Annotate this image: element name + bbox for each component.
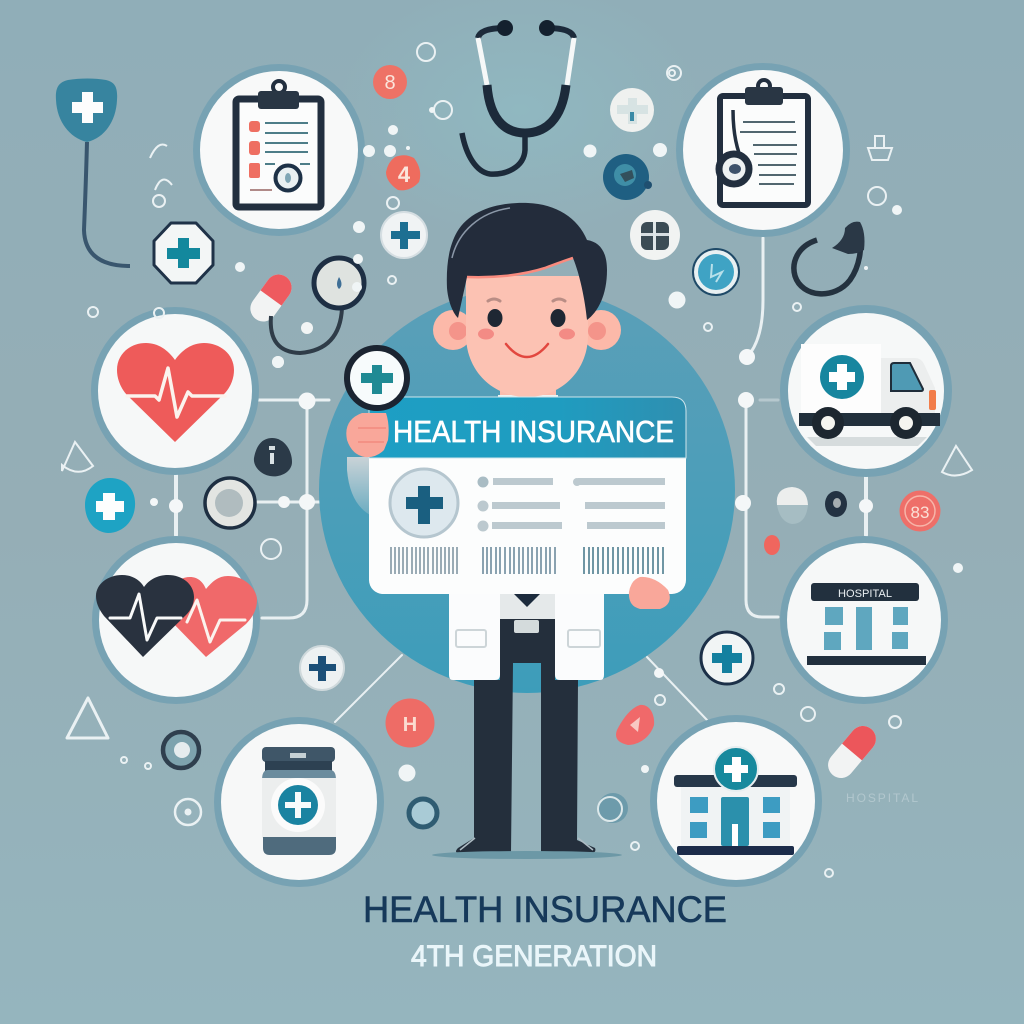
subtitle: 4TH GENERATION bbox=[411, 940, 657, 973]
main title: HEALTH INSURANCE bbox=[363, 889, 727, 930]
connector lines bbox=[150, 238, 873, 722]
badge: dark pin bbox=[254, 438, 292, 476]
hairline edge bbox=[467, 258, 573, 277]
cheeks bbox=[478, 328, 494, 340]
badge: red 4 bbox=[386, 155, 420, 190]
badge: dark oval bbox=[825, 491, 847, 517]
panel: heart bbox=[91, 307, 259, 475]
shoes highlight bbox=[460, 838, 593, 850]
insurance card bbox=[369, 397, 686, 594]
badge: ring blob right bbox=[598, 793, 628, 823]
face bbox=[466, 276, 588, 397]
badge: red 83 bbox=[900, 490, 940, 532]
legs and trousers bbox=[456, 619, 595, 853]
icon: floating badges bbox=[85, 65, 940, 827]
badge: top white plus bbox=[610, 88, 654, 132]
badge: red 8 bbox=[373, 65, 407, 99]
icon: hospital with cross sign bbox=[674, 747, 797, 855]
decorative specks bbox=[62, 43, 972, 877]
card info lines bbox=[478, 476, 665, 532]
eyes bbox=[488, 309, 502, 327]
panel: hospital bottom right bbox=[650, 715, 822, 887]
icon: red heart bbox=[165, 576, 257, 657]
ground shadow bbox=[432, 851, 622, 859]
neck bbox=[500, 380, 556, 398]
badge: red blob lower right bbox=[616, 705, 654, 745]
icon: top stethoscope bbox=[462, 20, 574, 174]
icon: red white pill left bbox=[245, 269, 297, 327]
icon: dark heart bbox=[96, 575, 194, 657]
panel: medicine jar bbox=[214, 717, 384, 887]
icon: clipboard with checklist bbox=[236, 81, 321, 207]
badge: plus lower left bbox=[300, 646, 344, 690]
magnifier bbox=[347, 348, 407, 408]
icon: small red white pill right bbox=[823, 721, 881, 783]
badge: dark ring left bbox=[163, 732, 199, 768]
badge: white blob bbox=[777, 487, 808, 524]
badge: white dark-centre button bbox=[630, 210, 680, 260]
card heading: HEALTH INSURANCE bbox=[393, 414, 674, 449]
icon: hospital building bbox=[807, 583, 926, 665]
badge: plus right bbox=[701, 632, 753, 684]
panel: clipboard top right bbox=[676, 63, 850, 237]
badge: teal plus bbox=[85, 478, 135, 533]
smile bbox=[506, 344, 548, 357]
big blue circle bbox=[319, 287, 735, 693]
card barcodes bbox=[391, 547, 663, 574]
badge: white plus near head bbox=[381, 212, 427, 258]
icon: red heart with pulse bbox=[117, 343, 234, 442]
sign text: HOSPITAL bbox=[838, 588, 892, 600]
title bbox=[363, 889, 727, 973]
icon: mid stethoscope bbox=[271, 258, 364, 368]
icon: hexagon cross bbox=[154, 223, 213, 283]
lab coat bbox=[449, 590, 604, 680]
sleeve bbox=[347, 457, 372, 516]
panel: two hearts bbox=[92, 536, 260, 704]
icon: right stethoscope bbox=[794, 222, 864, 294]
icon: ambulance truck bbox=[799, 344, 940, 446]
person bbox=[347, 203, 622, 859]
card seal bbox=[390, 469, 458, 537]
badge: red 8: 8 bbox=[384, 72, 396, 94]
badge: blue round bbox=[693, 249, 739, 295]
badge: red 83: 83 bbox=[911, 503, 929, 522]
badge: red lower left bbox=[386, 698, 434, 748]
panel: clipboard top left bbox=[193, 64, 365, 236]
hand holding magnifier bbox=[346, 348, 407, 457]
eyebrows bbox=[488, 299, 565, 301]
icon: clipboard with stethoscope bbox=[719, 80, 808, 205]
badge: dark ring bottom centre bbox=[409, 799, 437, 827]
badge: grey ring bbox=[205, 478, 255, 528]
lower hand bbox=[629, 577, 670, 609]
icon: shield with cross and tube bbox=[56, 78, 130, 266]
badge: red lower left: H bbox=[403, 714, 417, 736]
icon: jar with cross bbox=[262, 747, 336, 855]
hair highlight bbox=[452, 208, 510, 258]
panel: hospital right bbox=[780, 536, 948, 704]
badge: small red bbox=[764, 535, 780, 555]
ears bbox=[433, 310, 473, 350]
faint label: hospital: HOSPITAL bbox=[846, 791, 918, 805]
panel: truck bbox=[780, 305, 952, 477]
badge: dark teal blob bbox=[603, 154, 652, 200]
card header bbox=[369, 397, 686, 458]
badge: red 4: 4 bbox=[398, 162, 411, 187]
hair bbox=[447, 203, 607, 320]
